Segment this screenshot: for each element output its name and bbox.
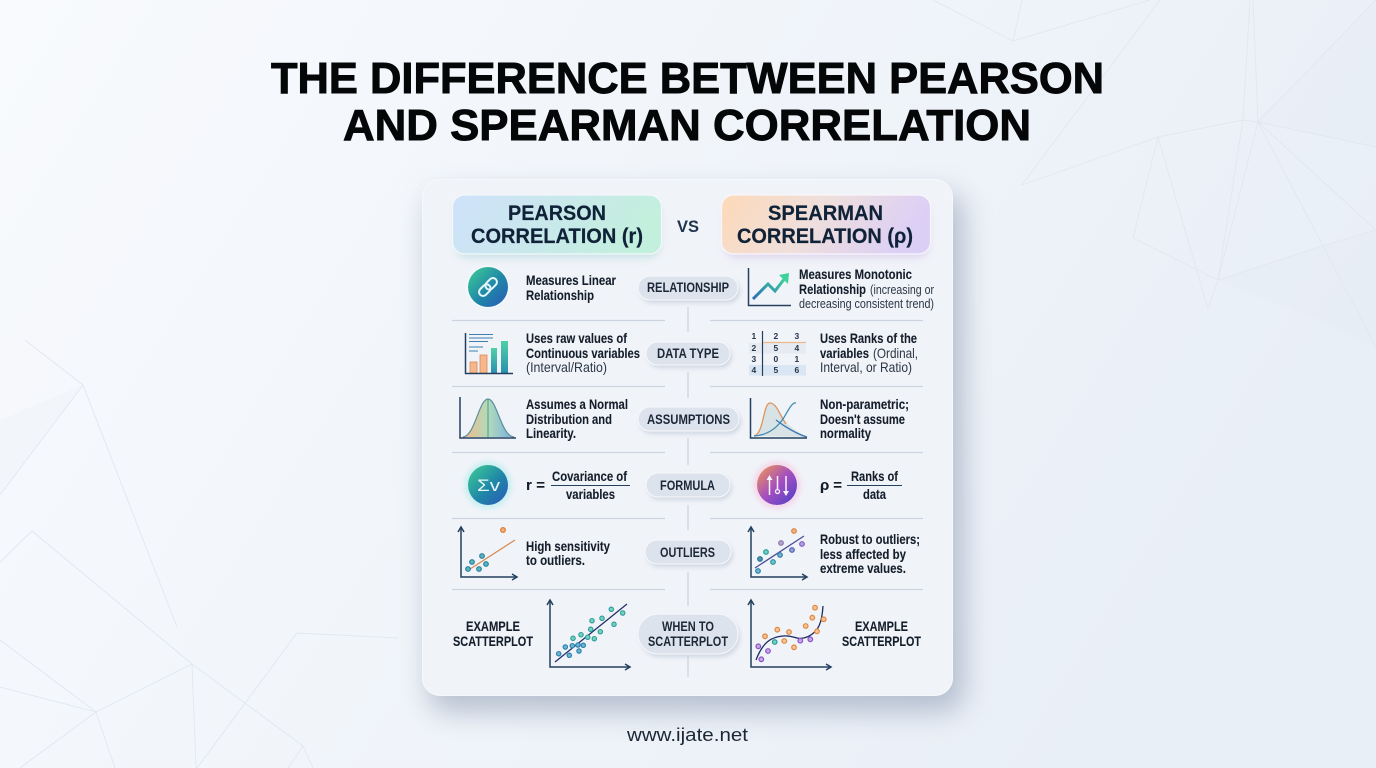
icon: sigma v: [464, 461, 512, 509]
text: Spearman relationship: Measures Monotonic: [799, 266, 912, 282]
icon: rank table: 2: [774, 331, 778, 341]
icon: outlier scatter, Pearson: [458, 527, 517, 580]
formula: Spearman: [820, 468, 902, 502]
text: Spearman data type: (Ordinal,: [873, 345, 918, 361]
icon: rank table: 4: [794, 343, 800, 353]
formula: Spearman: ρ =: [820, 477, 842, 494]
icon: rank table: 3: [752, 354, 756, 364]
chart: Pearson scatterplot: [547, 600, 630, 670]
vs label: VS: [677, 217, 699, 236]
text: Spearman assumptions: Non-parametric;: [820, 396, 909, 412]
chart: Spearman scatterplot: [748, 600, 831, 670]
pill: outliers: OUTLIERS: [660, 545, 715, 560]
pill: outliers: [645, 540, 733, 567]
header: Spearman correlation: [722, 195, 930, 258]
icon: rank table: 0: [774, 354, 778, 364]
row: formula: [464, 461, 902, 509]
icon: rank table: 2: [752, 343, 756, 353]
label: example scatterplot, Spearman: [842, 618, 921, 649]
text: Spearman relationship: (increasing or: [870, 282, 935, 297]
row: assumptions: [460, 396, 909, 441]
formula: Spearman: data: [863, 486, 886, 502]
icon: monotonic trend arrow: [748, 268, 791, 306]
text: Pearson outliers: [526, 538, 610, 568]
pill: assumptions: ASSUMPTIONS: [647, 412, 730, 427]
pill: formula: [646, 473, 732, 500]
icon: rank table: 5: [774, 343, 778, 353]
text: Pearson assumptions: [526, 396, 628, 441]
title: [271, 54, 1104, 150]
footer url: www.ijate.net: [626, 725, 748, 745]
header: Spearman correlation: CORRELATION (ρ): [737, 225, 913, 248]
icon: rank table: 1: [752, 331, 756, 341]
formula: Pearson: variables: [566, 486, 615, 502]
icon: sigma v: Σv: [477, 476, 501, 495]
text: Pearson data type: [526, 330, 640, 375]
text: Spearman assumptions: Doesn't assume: [820, 411, 905, 427]
text: Pearson assumptions: Distribution and: [526, 411, 612, 427]
text: Pearson assumptions: Assumes a Normal: [526, 396, 628, 412]
title: THE DIFFERENCE BETWEEN PEARSON: [271, 54, 1104, 103]
label: example scatterplot, Pearson: [453, 618, 533, 649]
icon: outlier scatter, Spearman: [748, 527, 807, 580]
label: example scatterplot, Spearman: EXAMPLE: [855, 618, 908, 634]
text: Pearson outliers: to outliers.: [526, 552, 585, 568]
icon: non-normal curves: [750, 398, 807, 438]
icon: rank table: [749, 331, 806, 376]
panel: comparison card: [422, 179, 964, 712]
header: Pearson correlation: CORRELATION (r): [471, 225, 643, 248]
icon: bar chart: [466, 333, 513, 374]
pill: assumptions: [638, 407, 741, 434]
text: Spearman assumptions: normality: [820, 425, 871, 441]
text: Spearman outliers: extreme values.: [820, 560, 906, 576]
icon: rank table: 4: [752, 365, 756, 375]
text: Spearman data type: Interval, or Ratio): [820, 359, 912, 375]
text: Spearman data type: variables: [820, 345, 869, 361]
text: Spearman outliers: [820, 531, 920, 576]
text: Spearman data type: [820, 330, 918, 375]
icon: rank table: 5: [774, 365, 778, 375]
pill: when to scatterplot: [638, 614, 740, 657]
icon: rank table: 1: [794, 354, 800, 364]
pill: when to scatterplot: WHEN TO: [662, 619, 714, 634]
label: example scatterplot, Pearson: SCATTERPLOT: [453, 633, 533, 649]
icon: rank arrows: [753, 461, 801, 509]
text: Pearson assumptions: Linearity.: [526, 425, 576, 441]
text: Spearman relationship: Relationship: [799, 281, 866, 297]
text: Pearson data type: Continuous variables: [526, 345, 640, 361]
pill: relationship: RELATIONSHIP: [647, 280, 729, 295]
header: Pearson correlation: [452, 195, 662, 258]
text: Pearson data type: (Interval/Ratio): [526, 359, 607, 375]
text: Spearman data type: Uses Ranks of the: [820, 330, 917, 346]
formula: Pearson: Covariance of: [552, 468, 627, 484]
text: Pearson data type: Uses raw values of: [526, 330, 627, 346]
text: Pearson outliers: High sensitivity: [526, 538, 610, 554]
pill: when to scatterplot: SCATTERPLOT: [648, 634, 729, 649]
text: Pearson relationship: Measures Linear: [526, 272, 616, 288]
row: when to scatterplot: [453, 600, 921, 670]
text: Spearman relationship: [799, 266, 935, 311]
header: Pearson correlation: PEARSON: [508, 202, 606, 225]
text: Spearman outliers: less affected by: [820, 546, 906, 562]
text: Pearson relationship: [526, 272, 616, 303]
label: example scatterplot, Pearson: EXAMPLE: [466, 618, 520, 634]
row: outliers: [458, 527, 920, 580]
label: example scatterplot, Spearman: SCATTERPLOT: [842, 633, 921, 649]
icon: normal distribution: [460, 397, 516, 438]
pill: formula: FORMULA: [660, 478, 715, 493]
formula: Pearson: [526, 468, 630, 502]
row: relationship: [466, 266, 935, 311]
icon: link: [466, 266, 510, 308]
text: Spearman relationship: decreasing consistent trend): [799, 296, 934, 311]
pill: relationship: [638, 276, 740, 303]
text: Spearman assumptions: [820, 396, 909, 441]
row: data type: [466, 330, 918, 376]
header: Spearman correlation: SPEARMAN: [768, 202, 883, 225]
formula: Spearman: Ranks of: [851, 468, 898, 484]
text: Spearman outliers: Robust to outliers;: [820, 531, 920, 547]
pill: data type: DATA TYPE: [657, 346, 719, 361]
formula: Pearson: r =: [526, 477, 545, 494]
icon: rank table: 6: [794, 365, 800, 375]
pill: data type: [646, 342, 732, 368]
title: AND SPEARMAN CORRELATION: [343, 101, 1031, 150]
text: Pearson relationship: Relationship: [526, 287, 594, 303]
icon: rank table: 3: [794, 331, 800, 341]
